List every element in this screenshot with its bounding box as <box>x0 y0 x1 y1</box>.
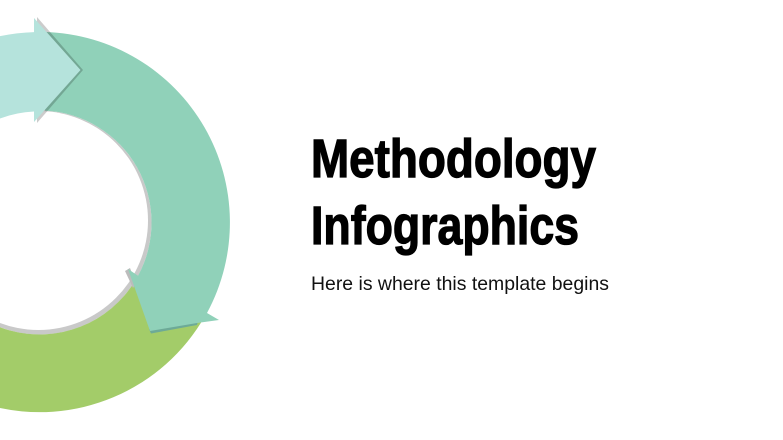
green ring segment <box>0 222 205 412</box>
title: Infographics <box>311 196 579 256</box>
circular arrow cycle <box>0 17 230 412</box>
title: Methodology <box>311 129 596 189</box>
inner ring shadow <box>0 110 152 334</box>
light aqua arrow segment <box>0 17 83 144</box>
subtitle: Here is where this template begins <box>311 273 609 295</box>
light arrow body <box>0 18 80 144</box>
teal arrow body <box>45 32 230 331</box>
teal arrow segment <box>45 32 230 334</box>
teal arrow shadow <box>125 268 136 288</box>
title <box>311 129 596 256</box>
light arrow shadow <box>37 17 83 123</box>
